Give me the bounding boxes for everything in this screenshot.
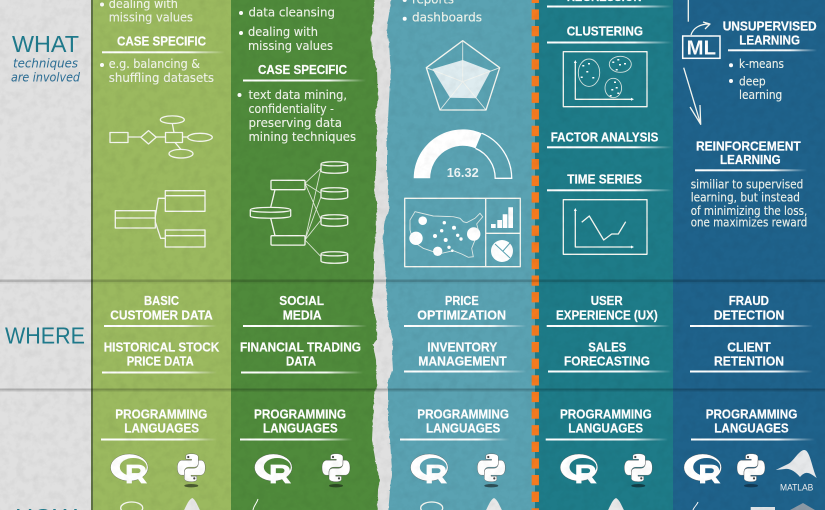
column edge shadow — [91, 0, 93, 510]
text: reinforcement description: one maximizes reward — [691, 216, 807, 230]
where: basic customer data — [104, 293, 217, 327]
list: k-means, deep learning: learning — [739, 88, 782, 102]
where: basic customer data: BASIC — [144, 293, 179, 308]
how: programming languages — [546, 406, 668, 440]
icon: Matlab peak cut off at bottom — [183, 498, 201, 510]
where: client retention — [690, 339, 813, 372]
icon: grey pentagon cut off at bottom — [790, 503, 815, 510]
icon: R logo — [410, 454, 448, 489]
where: inventory management: INVENTORY — [427, 339, 497, 354]
text: techniques are involved — [11, 57, 80, 84]
how: programming languages: PROGRAMMING — [706, 406, 797, 421]
text: techniques are involved: techniques — [13, 57, 78, 71]
where: price optimization: OPTIMIZATION — [417, 307, 506, 322]
diagram: linked tables — [115, 191, 205, 247]
list: case specific techniques: preserving data — [248, 116, 342, 130]
text: reinforcement description: similiar to supervised — [691, 178, 803, 192]
how: programming languages: LANGUAGES — [426, 420, 500, 435]
where: fraud detection: FRAUD — [729, 293, 769, 308]
where: financial trading data — [240, 339, 363, 374]
icon: Java steam cut off at bottom — [253, 499, 258, 510]
heading: time series: TIME SERIES — [567, 172, 642, 187]
heading: time series — [547, 172, 672, 191]
where: social media — [243, 293, 367, 327]
how: programming languages: PROGRAMMING — [417, 406, 509, 421]
where: historical stock price data: HISTORICAL STOCK — [104, 339, 220, 354]
chart: radar — [426, 41, 500, 110]
chart: dashboard with map, bars and pie — [405, 198, 520, 267]
text: techniques are involved: are involved — [11, 70, 80, 84]
icon: R logo: R — [425, 459, 447, 489]
icon: table cut off at bottom — [751, 507, 775, 510]
diagram: database network — [250, 162, 348, 263]
where: price optimization: PRICE — [445, 293, 479, 308]
icon: Matlab peak cut off at bottom — [485, 498, 503, 510]
how: programming languages — [400, 406, 510, 440]
icon: R logo: R — [269, 459, 291, 489]
icon: Matlab peak cut off at bottom — [607, 498, 625, 510]
list: balancing and shuffling — [100, 57, 214, 85]
where: inventory management — [404, 339, 527, 372]
heading: unsupervised learning — [723, 19, 817, 51]
divider: orange dashed line — [532, 0, 539, 510]
heading: case specific — [102, 34, 225, 53]
diagram: entity relationship — [110, 116, 212, 158]
heading: clustering: CLUSTERING — [567, 24, 643, 39]
list: k-means, deep learning: k-means — [739, 57, 784, 71]
arrow: from supervised down to ML — [687, 0, 689, 22]
icon: database cut off at bottom — [121, 502, 143, 510]
list: general techniques — [239, 6, 335, 53]
where: fraud detection: DETECTION — [714, 307, 784, 322]
where: historical stock price data — [102, 339, 220, 374]
where: financial trading data: FINANCIAL TRADING — [240, 339, 361, 354]
heading: WHERE: WHERE — [5, 322, 85, 348]
icon: Python logo — [477, 454, 505, 487]
where: financial trading data: DATA — [286, 353, 316, 368]
list: k-means, deep learning: deep — [739, 75, 766, 89]
heading: reinforcement learning: LEARNING — [720, 152, 781, 167]
how: programming languages — [101, 406, 217, 440]
heading: case specific — [243, 62, 366, 82]
icon: Python logo — [737, 454, 765, 487]
panel: column 2 dark green — [225, 0, 380, 510]
where: price optimization — [404, 293, 527, 327]
icon: R logo: R — [698, 459, 721, 489]
heading: case specific: CASE SPECIFIC — [117, 34, 206, 49]
heading: case specific: CASE SPECIFIC — [258, 62, 347, 77]
how: programming languages: LANGUAGES — [568, 420, 643, 435]
where: historical stock price data: PRICE DATA — [127, 353, 194, 368]
heading: reinforcement learning: REINFORCEMENT — [696, 138, 801, 153]
list: dealing with missing values: missing values — [109, 11, 193, 25]
heading: regression cut off at top — [547, 0, 672, 8]
list: k-means, deep learning — [729, 57, 784, 102]
chart: gauge 16.32: 16.32 — [447, 165, 479, 180]
pie chart — [491, 240, 513, 262]
list: general techniques: missing values — [248, 39, 333, 53]
map of the USA with bubbles — [409, 212, 483, 257]
where: user experience — [547, 293, 670, 327]
how: programming languages: LANGUAGES — [124, 420, 199, 435]
heading: unsupervised learning: UNSUPERVISED — [723, 19, 817, 34]
where: client retention: CLIENT — [727, 339, 771, 354]
chart: clustering scatter — [563, 52, 647, 107]
list: case specific techniques: text data mining, — [248, 88, 347, 102]
icon: Matlab logo: MATLAB — [780, 483, 813, 494]
where: sales forecasting — [548, 339, 672, 372]
how: programming languages: PROGRAMMING — [115, 406, 207, 421]
list: case specific techniques: confidentiality - — [248, 102, 334, 116]
icon: Java steam cut off at bottom — [693, 502, 698, 510]
icon: database cut off at bottom — [421, 502, 443, 510]
list: balancing and shuffling: shuffling datasets — [109, 71, 214, 85]
how: programming languages: LANGUAGES — [714, 420, 789, 435]
text: reinforcement description: learning, but instead — [691, 191, 800, 205]
list: case specific techniques — [238, 88, 356, 144]
heading: clustering — [547, 24, 672, 44]
icon: Python logo — [177, 454, 205, 487]
icon: R logo — [560, 454, 598, 489]
where: user experience: USER — [591, 293, 623, 308]
how: programming languages: PROGRAMMING — [560, 406, 652, 421]
where: social media: MEDIA — [283, 307, 322, 322]
where: sales forecasting: FORECASTING — [564, 353, 650, 368]
heading: reinforcement learning — [695, 138, 807, 171]
arrow: ML to unsupervised — [691, 22, 710, 35]
list: reports and dashboards: dashboards — [412, 11, 482, 25]
icon: R logo — [254, 454, 292, 489]
heading: unsupervised learning: LEARNING — [739, 33, 800, 48]
icon: Python logo — [322, 454, 350, 487]
panel: column 5 blue — [673, 0, 825, 510]
panel: column 1 light green — [91, 0, 231, 510]
where: fraud detection — [690, 293, 813, 327]
list: general techniques: dealing with — [248, 25, 318, 39]
icon: Matlab logo — [776, 450, 817, 494]
icon: R logo — [684, 454, 722, 489]
bar chart — [491, 207, 513, 228]
where: user experience: EXPERIENCE (UX) — [556, 307, 658, 322]
text: reinforcement description: of minimizing the loss, — [691, 204, 807, 218]
where: sales forecasting: SALES — [588, 339, 626, 354]
where: social media: SOCIAL — [279, 293, 324, 308]
chart: time series line — [563, 200, 647, 254]
how: programming languages: LANGUAGES — [263, 420, 338, 435]
where: inventory management: MANAGEMENT — [418, 353, 507, 368]
how: programming languages: PROGRAMMING — [254, 406, 346, 421]
icon: R logo — [110, 454, 148, 489]
list: case specific techniques: mining techniques — [248, 130, 356, 144]
panel: column 3 light teal — [383, 0, 540, 510]
text: reinforcement description — [691, 178, 807, 230]
where: basic customer data: CUSTOMER DATA — [110, 307, 213, 322]
how: programming languages — [691, 406, 815, 440]
arrow: ML to reinforcement — [684, 68, 701, 124]
how: programming languages — [240, 406, 353, 440]
icon: Python logo — [624, 454, 652, 487]
list: dealing with missing values — [100, 0, 193, 25]
where: client retention: RETENTION — [714, 353, 784, 368]
list: balancing and shuffling: e.g. balancing & — [109, 57, 200, 71]
panel: column 4 teal — [535, 0, 673, 510]
list: general techniques: data cleansing — [248, 6, 335, 20]
list: reports and dashboards — [403, 0, 482, 25]
heading: factor analysis: FACTOR ANALYSIS — [551, 129, 658, 144]
icon: R logo: R — [125, 459, 147, 489]
icon: ML box: ML — [687, 37, 716, 59]
icon: R logo: R — [575, 459, 597, 489]
heading: WHAT: WHAT — [12, 31, 79, 57]
chart: gauge 16.32 — [414, 129, 512, 180]
